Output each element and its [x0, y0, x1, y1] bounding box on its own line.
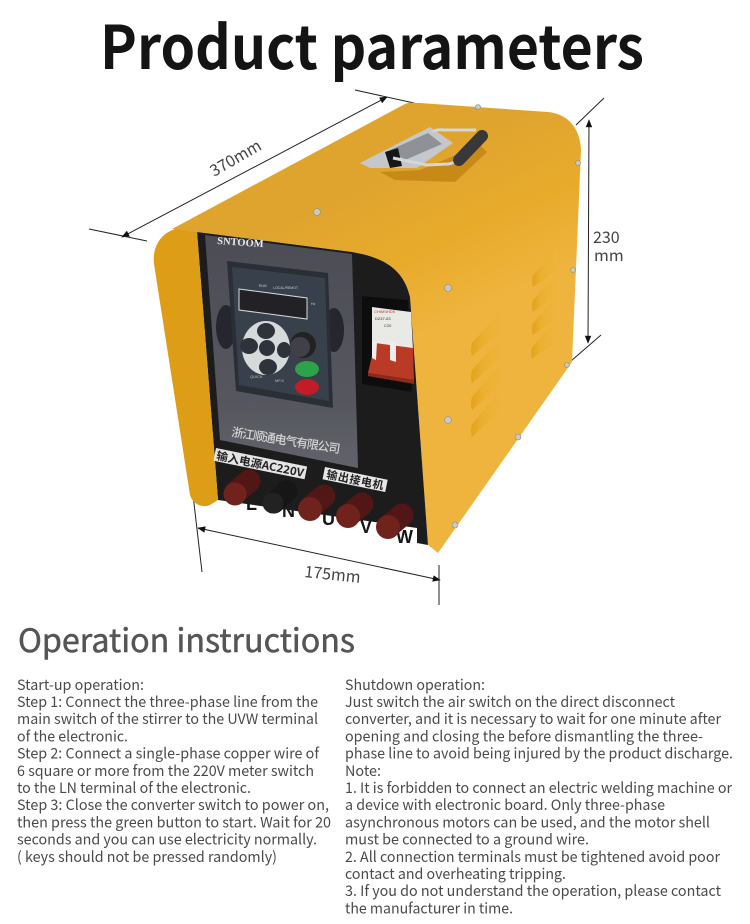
- breaker recess: [362, 296, 412, 392]
- start-up instructions text: 6 square or more from the 220V meter switch: [17, 760, 314, 781]
- display: [239, 289, 307, 319]
- terminal letters: L: [246, 494, 257, 514]
- shutdown instructions and notes text: Shutdown operation:: [345, 674, 485, 695]
- company name: 浙江顺通电气有限公司: [230, 423, 342, 457]
- round keypad: [240, 321, 291, 375]
- run button: [295, 361, 319, 377]
- keypad small labels: [250, 374, 284, 383]
- screws: [314, 104, 580, 528]
- terminal letters: W: [396, 527, 413, 547]
- knob: [290, 332, 316, 358]
- breaker switch: [368, 343, 414, 380]
- breaker body: [372, 307, 413, 350]
- dimension: length 370mm: 370mm: [204, 132, 265, 181]
- title: Product parameters: [100, 0, 644, 87]
- inner flange left: [154, 229, 218, 506]
- keypad face: [232, 267, 329, 401]
- stop button: [295, 379, 319, 395]
- brand label: SNTOOM: [217, 236, 264, 250]
- terminal letters: V: [360, 517, 372, 537]
- shutdown instructions and notes text: a device with electronic board. Only three-phase: [345, 794, 665, 815]
- start-up instructions text: Step 3: Close the converter switch to power on,: [17, 794, 329, 815]
- start-up instructions text: [17, 674, 331, 867]
- led labels: Hz: [311, 302, 316, 306]
- start-up instructions text: ( keys should not be pressed randomly): [17, 846, 277, 867]
- shutdown instructions and notes text: asynchronous motors can be used, and the motor shell: [345, 811, 710, 832]
- shutdown instructions and notes text: 2. All connection terminals must be tightened avoid poor: [345, 846, 720, 867]
- side vents: [471, 248, 558, 437]
- shutdown instructions and notes text: Just switch the air switch on the direct disconnect: [345, 691, 676, 712]
- terminal letters: N: [282, 501, 295, 521]
- section heading: Operation instructions: [18, 616, 355, 662]
- cabinet top and side shell: [172, 103, 581, 553]
- shutdown instructions and notes text: contact and overheating tripping.: [345, 863, 566, 884]
- keypad small labels: MF.K: [275, 378, 284, 383]
- shutdown instructions and notes text: [345, 674, 733, 918]
- start-up instructions text: main switch of the stirrer to the UVW terminal: [17, 708, 318, 729]
- keypad recess: [227, 261, 333, 408]
- dimension: length 370mm: [89, 90, 414, 241]
- breaker labels: [374, 309, 396, 328]
- start-up instructions text: of the electronic.: [17, 725, 128, 746]
- start-up instructions text: to the LN terminal of the electronic.: [17, 777, 251, 798]
- dimension: height 230mm: mm: [594, 242, 624, 266]
- dimension: width 175mm: 175mm: [303, 558, 362, 588]
- shutdown instructions and notes text: phase line to avoid being injured by the product discharge.: [345, 743, 733, 764]
- shutdown instructions and notes text: converter, and it is necessary to wait for one minute after: [345, 708, 721, 729]
- terminal letters: U: [322, 509, 335, 529]
- start-up instructions text: seconds and you can use electricity normally.: [17, 829, 317, 850]
- shutdown instructions and notes text: 3. If you do not understand the operation, please contact: [345, 880, 722, 901]
- input label: 输入电源AC220V: [215, 447, 306, 481]
- led labels: LOCAL/REMOT: [273, 286, 299, 290]
- dimension: height 230mm: [571, 98, 624, 361]
- black front panel: [197, 232, 428, 545]
- terminal letters: [246, 494, 413, 547]
- start-up instructions text: then press the green button to start. Wait for 20: [17, 811, 331, 832]
- output label: 输出接电机: [325, 466, 385, 493]
- breaker labels: C20: [384, 323, 392, 328]
- led labels: [259, 284, 316, 306]
- breaker labels: CHIMSHDS: [374, 309, 396, 314]
- shutdown instructions and notes text: the manufacturer in time.: [345, 897, 513, 918]
- keypad small labels: QUICK: [250, 374, 263, 379]
- start-up instructions text: Start-up operation:: [17, 674, 144, 695]
- dimension: height 230mm: 230: [593, 224, 620, 248]
- dimension: width 175mm: [188, 452, 440, 605]
- inverter panel: [205, 235, 358, 468]
- shutdown instructions and notes text: 1. It is forbidden to connect an electric welding machine or: [345, 777, 732, 798]
- led labels: RUN: [259, 284, 267, 288]
- product photo: converter cabinet: [154, 103, 581, 553]
- shutdown instructions and notes text: Note:: [345, 760, 381, 781]
- handle: [360, 127, 487, 182]
- shutdown instructions and notes text: must be connected to a ground wire.: [345, 829, 589, 850]
- breaker labels: DZ47-63: [375, 316, 391, 321]
- start-up instructions text: Step 2: Connect a single-phase copper wire of: [17, 743, 320, 764]
- start-up instructions text: Step 1: Connect the three-phase line from the: [17, 691, 318, 712]
- shutdown instructions and notes text: opening and closing the before dismantling the three-: [345, 725, 703, 746]
- terminals: [224, 481, 402, 539]
- keypad side bumps: [216, 305, 344, 352]
